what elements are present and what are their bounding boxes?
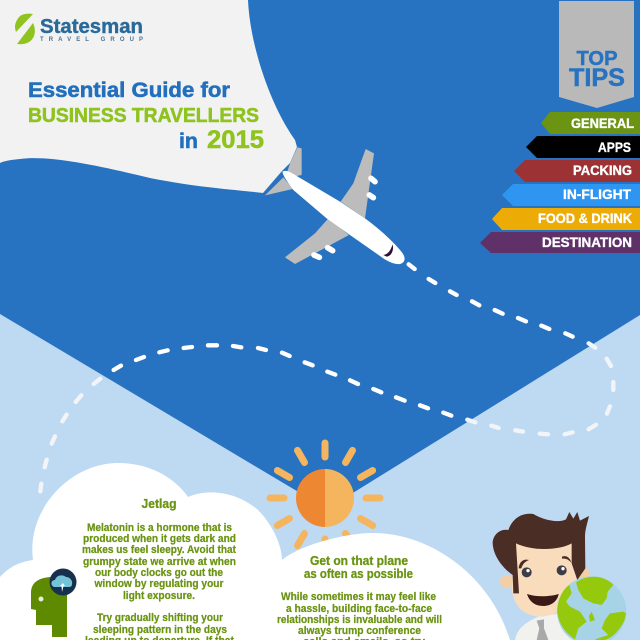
face features — [519, 556, 571, 606]
plane advice body text: While sometimes it may feel like — [281, 591, 436, 603]
plane fuselage — [282, 171, 405, 264]
jetlag body text: makes us feel sleepy. Avoid that — [82, 544, 236, 556]
title — [28, 79, 264, 154]
text block: get on that plane — [277, 554, 442, 640]
head — [500, 542, 590, 617]
flight path: right dashes — [327, 264, 613, 434]
hair — [493, 512, 589, 593]
jetlag body text: light exposure. — [123, 590, 195, 602]
icon: head with storm cloud — [31, 568, 76, 637]
ribbon: food and drink: FOOD & DRINK — [538, 211, 632, 226]
heading: jetlag: Jetlag — [142, 497, 176, 511]
flight path: left dashes — [40, 345, 313, 491]
title: BUSINESS TRAVELLERS — [28, 105, 259, 127]
plane cockpit window — [383, 244, 393, 257]
logo — [15, 14, 143, 44]
banner: top tips: TIPS — [569, 64, 625, 92]
banner: top tips — [559, 1, 634, 108]
ribbon: packing: PACKING — [573, 163, 632, 178]
ribbon: apps: APPS — [598, 140, 631, 155]
logo tagline: TRAVEL GROUP — [40, 37, 143, 43]
category ribbons — [480, 112, 640, 253]
logo wordmark: Statesman — [40, 16, 143, 38]
plane advice body text: a hassle, building face-to-face — [286, 603, 432, 615]
ribbon: destination — [480, 232, 640, 253]
jetlag body text: grumpy state we arrive at when — [83, 556, 236, 568]
ribbon: food and drink — [492, 208, 640, 230]
heading: get on that plane: as often as possible — [304, 567, 413, 581]
title: Essential Guide for — [28, 79, 230, 102]
panel: header swoosh — [0, 0, 297, 193]
ribbon: in-flight: IN-FLIGHT — [563, 187, 632, 202]
ribbon: packing — [514, 160, 640, 182]
plane advice body text — [277, 591, 442, 640]
plane advice body text: relationships is invaluable and will — [277, 614, 442, 626]
jetlag body text: window by regulating your — [94, 578, 224, 590]
plane advice body text: always trump conference — [298, 625, 421, 637]
text block: jetlag — [82, 497, 236, 640]
ribbon: general — [541, 112, 640, 134]
illustration: businessman with globe — [493, 512, 626, 640]
globe — [557, 576, 626, 640]
plane engines — [314, 178, 375, 257]
illustration: airplane — [265, 147, 405, 264]
plane tail fins — [265, 147, 302, 195]
panel: white clouds — [0, 463, 510, 640]
jetlag body text: produced when it gets dark and — [83, 533, 236, 545]
plane wings — [285, 149, 374, 264]
jetlag body text: Melatonin is a hormone that is — [87, 522, 232, 534]
title: 2015 — [207, 126, 264, 154]
ribbon: general: GENERAL — [571, 116, 634, 131]
heading: get on that plane — [304, 554, 413, 581]
jetlag body text: our body clocks go out the — [95, 567, 223, 579]
icon: logo leaf — [15, 14, 35, 44]
panel: light sky background — [0, 314, 640, 640]
ribbon: destination: DESTINATION — [542, 235, 632, 250]
jetlag body text: sleeping pattern in the days — [93, 624, 227, 636]
icon: sun — [270, 443, 380, 553]
title: in — [179, 130, 198, 153]
ribbon: in-flight — [502, 184, 640, 206]
shirt and tie — [515, 613, 577, 640]
jetlag body text: Try gradually shifting your — [97, 612, 224, 624]
jetlag body text — [82, 522, 236, 640]
heading: get on that plane: Get on that plane — [310, 554, 408, 568]
banner: top tips: TOP — [576, 48, 618, 70]
ribbon: apps — [526, 136, 640, 158]
